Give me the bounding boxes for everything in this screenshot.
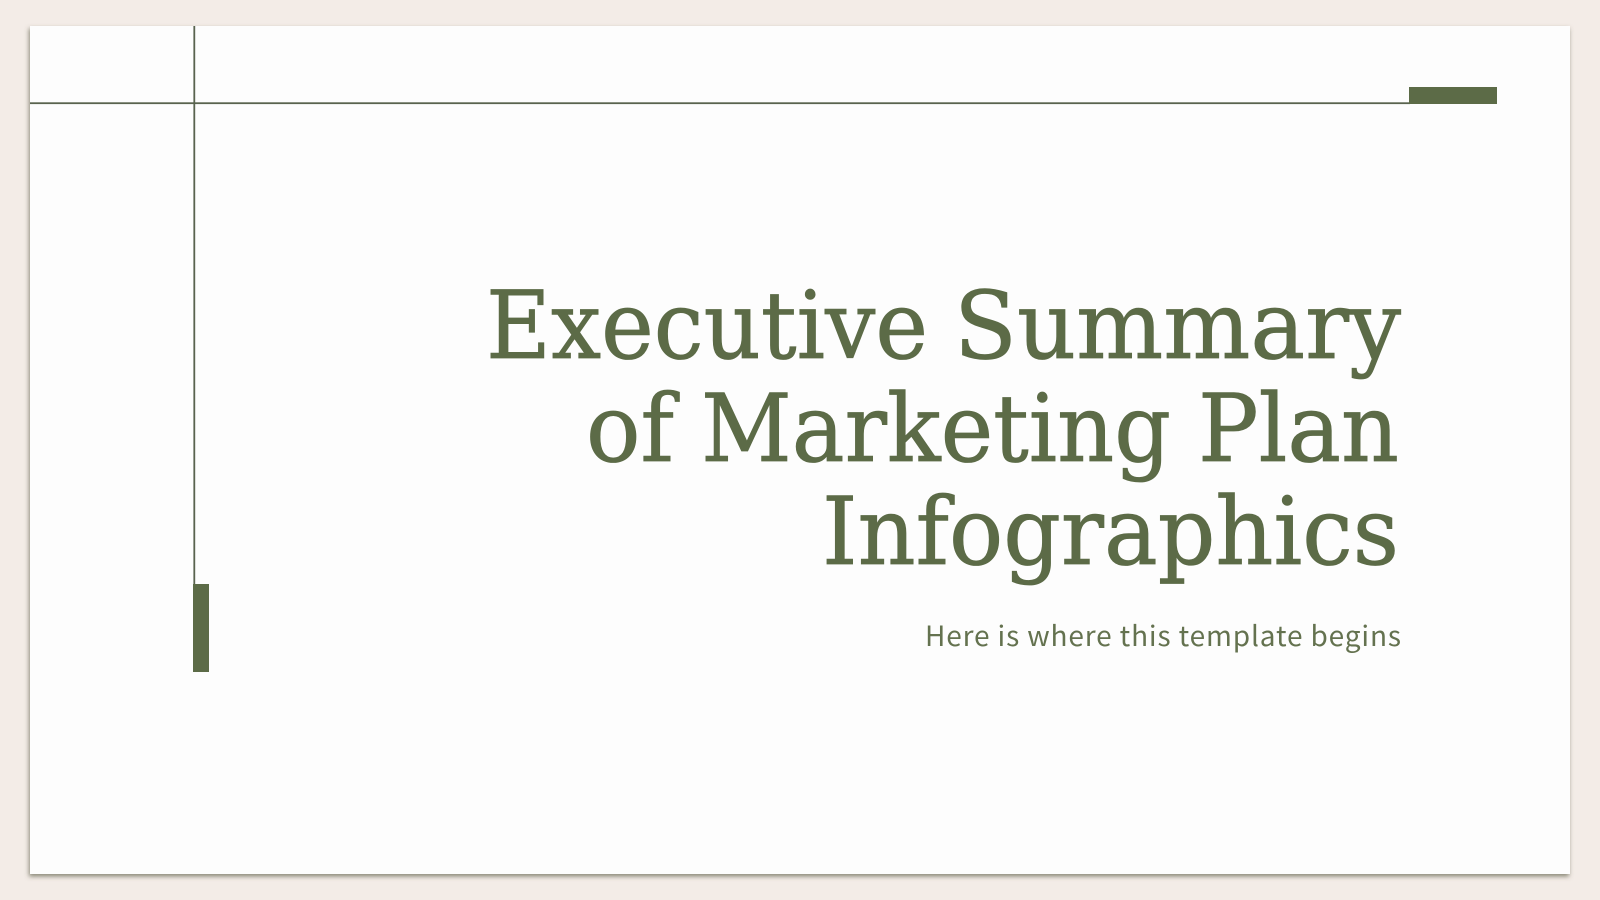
title: Executive (486, 272, 928, 381)
subtitle: Here is where this template begins (925, 615, 1401, 655)
title (486, 272, 1401, 587)
title: of (586, 375, 680, 484)
vertical rule (193, 26, 195, 586)
title: Marketing (701, 375, 1171, 484)
accent bar: top right (1409, 87, 1497, 104)
title: Plan (1198, 375, 1399, 484)
accent bar: left (193, 584, 209, 672)
title: Summary (954, 272, 1401, 381)
title: Infographics (822, 478, 1399, 587)
horizontal rule (30, 102, 1410, 104)
